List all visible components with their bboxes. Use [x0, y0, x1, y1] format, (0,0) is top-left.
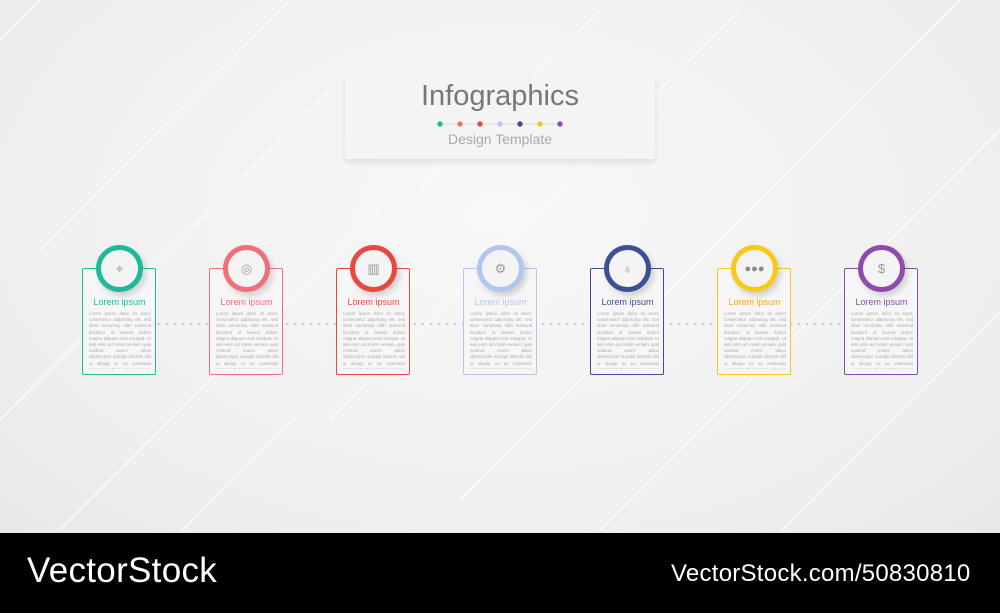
text: Lorem ipsum	[601, 297, 654, 307]
icon: gears	[477, 245, 524, 292]
icon: people	[731, 245, 778, 292]
icon: chart: ▥	[367, 260, 380, 276]
icon: bulb: ♁	[623, 261, 632, 276]
footer logo: VectorStock	[27, 551, 217, 590]
step 3	[336, 245, 410, 375]
step 1	[82, 245, 156, 375]
title: Infographics	[421, 80, 579, 112]
icon: money: $	[878, 261, 885, 276]
text: Lorem ipsum	[474, 297, 527, 307]
subtitle: Design Template	[448, 131, 552, 147]
icon: chart	[350, 245, 397, 292]
text: Lorem ipsum	[855, 297, 908, 307]
step 2	[209, 245, 283, 375]
step 4	[463, 245, 537, 375]
step 5	[590, 245, 664, 375]
icon: location: ⌖	[116, 260, 123, 276]
icon: target: ◎	[241, 260, 252, 276]
step 7	[844, 245, 918, 375]
step 6	[717, 245, 791, 375]
icon: money	[858, 245, 905, 292]
icon: people: ●●●	[745, 262, 764, 274]
text: Lorem ipsum	[220, 297, 273, 307]
title panel	[345, 76, 655, 159]
icon: gears: ⚙	[495, 260, 506, 276]
icon: bulb	[604, 245, 651, 292]
text: Lorem ipsum	[728, 297, 781, 307]
icon: target	[223, 245, 270, 292]
text: Lorem ipsum	[93, 297, 146, 307]
text: Lorem ipsum	[347, 297, 400, 307]
footer url: VectorStock.com/50830810	[671, 560, 971, 587]
color dots	[437, 121, 563, 127]
icon: location	[96, 245, 143, 292]
footer bar	[0, 533, 1000, 613]
